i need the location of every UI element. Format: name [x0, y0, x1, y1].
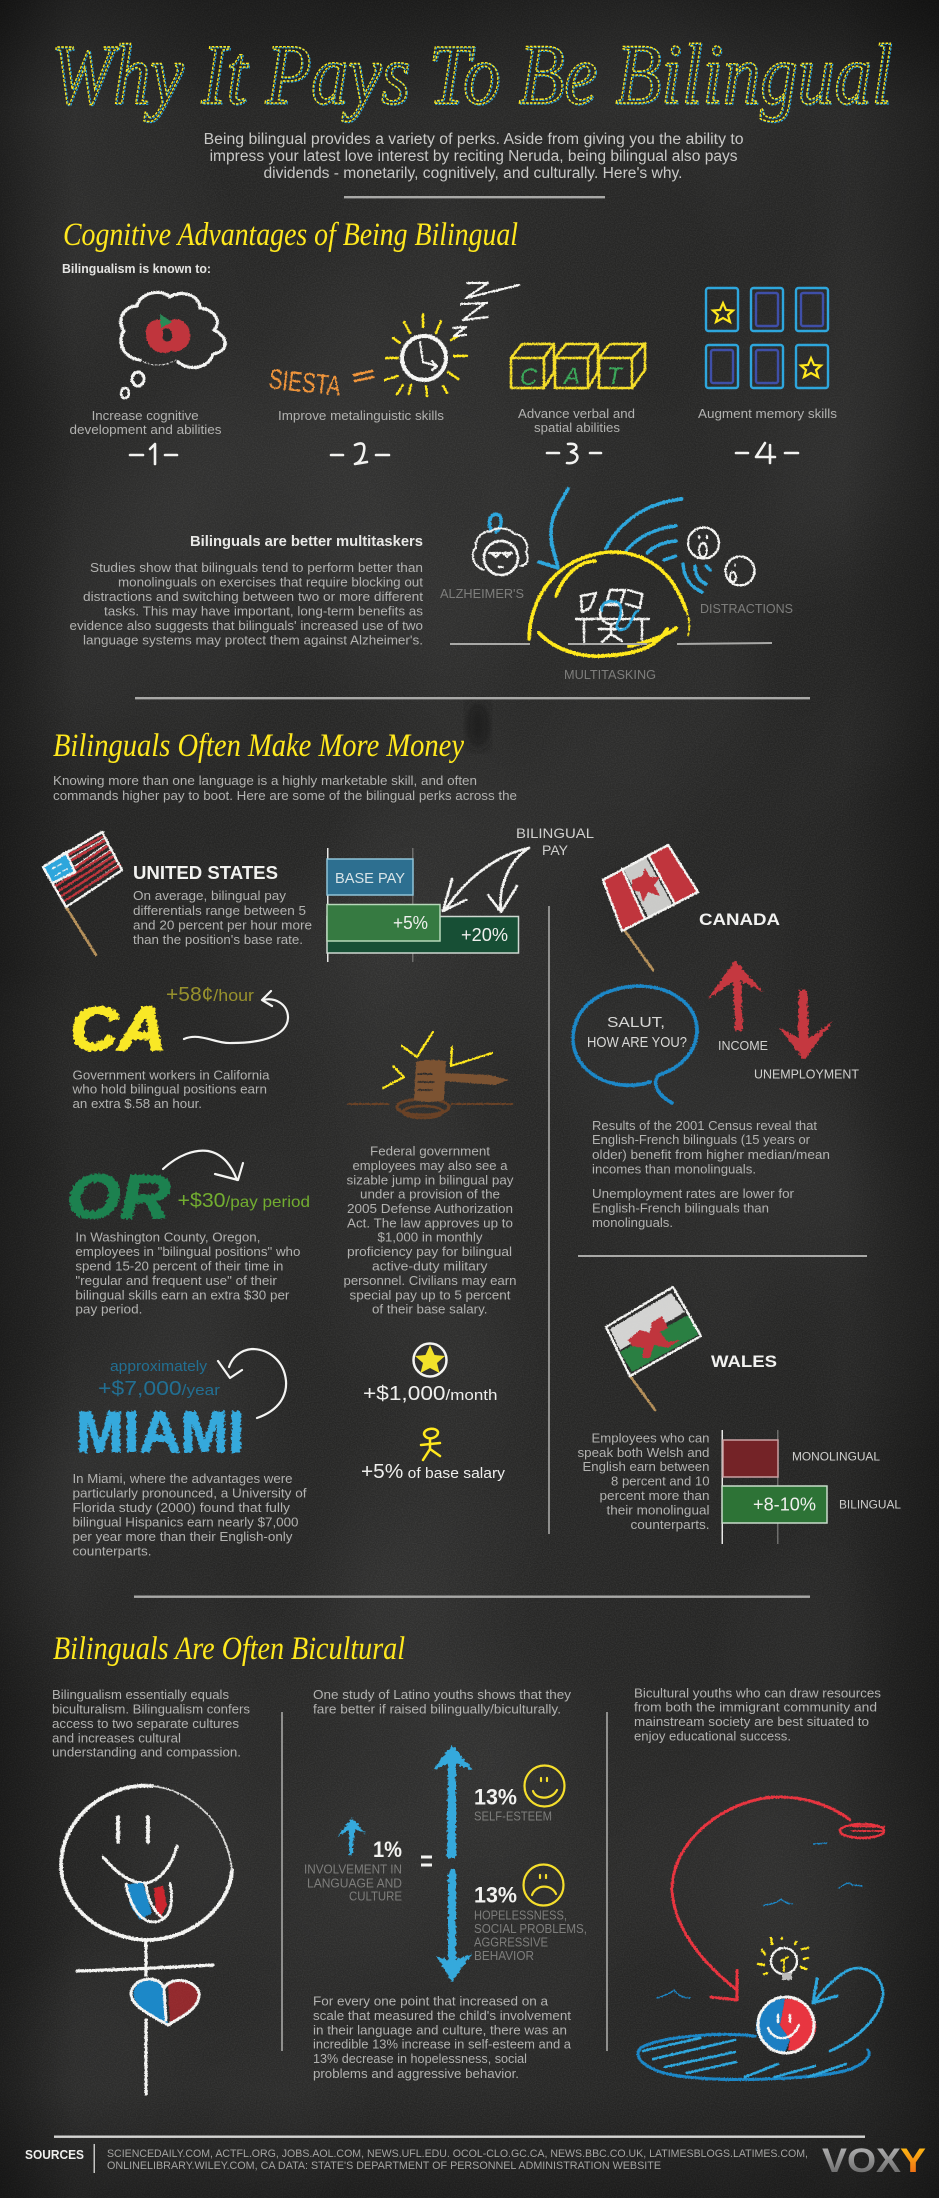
icon: CAT blocks: A [562, 363, 580, 390]
wales text: counterparts. [630, 1517, 710, 1532]
stat: hopelessness: 13% [474, 1882, 517, 1908]
label: involvement: LANGUAGE AND [307, 1876, 402, 1890]
success text: from both the immigrant community and [634, 1700, 877, 1714]
oregon text: spend 15-20 percent of their time in [75, 1258, 283, 1274]
chart: base pay vs bilingual pay [327, 848, 518, 962]
us text: On average, bilingual pay [133, 888, 287, 903]
oregon text: bilingual skills earn an extra $30 per [75, 1288, 290, 1302]
federal text: special pay up to 5 percent [350, 1288, 511, 1302]
icon: big up arrow [433, 1745, 473, 1858]
country: united states: UNITED STATES [133, 863, 278, 883]
bar: +5% [327, 904, 440, 941]
stat: hopelessness: BEHAVIOR [474, 1948, 534, 1963]
logo: voxy: VOX [822, 2142, 901, 2180]
study detail text: in their language and culture, there was an [313, 2022, 567, 2038]
panel: federal [344, 1032, 516, 1483]
panel: multitaskers [70, 489, 793, 682]
caption 1: Increase cognitive [92, 408, 199, 423]
label: multitasking: MULTITASKING [564, 667, 656, 682]
label: bilingual pay [516, 825, 594, 858]
equals sign [421, 1857, 432, 1865]
arrow: CA [184, 991, 288, 1043]
federal text: sizable jump in bilingual pay [346, 1172, 514, 1188]
section: money [25, 728, 926, 2180]
icon: star badge [414, 1344, 446, 1376]
value: +$30 per pay period: +$30/pay period [178, 1190, 310, 1212]
sources list [107, 2148, 808, 2172]
stat: hopelessness: SOCIAL PROBLEMS, [474, 1921, 587, 1936]
miami text: particularly pronounced, a University of [72, 1486, 307, 1500]
country: wales: WALES [711, 1352, 777, 1371]
stat: 1%: 1% [373, 1837, 402, 1862]
icon: unemployment arrow down [779, 990, 833, 1060]
federal text: Federal government [370, 1144, 490, 1158]
arrow: miami [218, 1349, 286, 1418]
oregon text: pay period. [75, 1302, 142, 1316]
canada text: older) benefit from higher median/mean [592, 1147, 830, 1162]
label: bilingual pay: PAY [542, 842, 569, 858]
chart: wales earnings [722, 1430, 902, 1544]
bicultural text left: biculturalism. Bilingualism confers [52, 1702, 250, 1716]
federal text [344, 1144, 516, 1316]
icon: alzheimer's granny [473, 514, 528, 575]
stat: hopelessness: AGGRESSIVE [474, 1934, 548, 1950]
federal text: of their base salary. [372, 1302, 488, 1316]
icon: happy face [524, 1766, 564, 1806]
bicultural text left: Bilingualism essentially equals [52, 1687, 229, 1702]
bicultural text left: and increases cultural [52, 1730, 181, 1746]
california text [71, 1068, 270, 1111]
icon: big down arrow [436, 1869, 472, 1982]
subheading: Bilingualism is known to: [62, 261, 211, 276]
miami text: per year more than their English-only [72, 1529, 293, 1544]
arrows: bilingual pay [443, 848, 529, 912]
success text: Bicultural youths who can draw resources [634, 1686, 882, 1700]
label: CA: CA [70, 995, 166, 1064]
intro text: Being bilingual provides a variety of perks. Aside from giving you the ability to [204, 131, 744, 148]
bar: +5%: +5% [393, 913, 428, 933]
icon: speech bubble: HOW ARE YOU? [587, 1034, 687, 1051]
icon: income arrow up [708, 960, 763, 1031]
icon: yellow stick figure [421, 1429, 440, 1460]
federal text: active-duty military [372, 1258, 488, 1274]
bicultural text left [52, 1687, 250, 1760]
wales text: their monolingual [606, 1502, 710, 1518]
money intro: commands higher pay to boot. Here are some of the bilingual perks across the [53, 788, 517, 803]
label: income: INCOME [718, 1039, 768, 1053]
panel: educational success [634, 1686, 884, 2079]
caption 3 [518, 406, 635, 435]
federal text: Act. The law approves up to [347, 1216, 513, 1230]
california text: who hold bilingual positions earn [71, 1082, 267, 1096]
bicultural text left: access to two separate cultures [52, 1716, 240, 1731]
stat: hopelessness [474, 1882, 587, 1963]
stat: self-esteem: 13% [474, 1784, 517, 1810]
label: involvement [304, 1862, 402, 1904]
sources list: SCIENCEDAILY.COM, ACTFL.ORG, JOBS.AOL.COM, NEWS.UFL.EDU. OCOL-CLO.GC.CA, NEWS.BBC.CO.UK, LATIMESBLOGS.LATIMES.COM, [107, 2148, 808, 2160]
icon: speech bubble: SALUT, [607, 1014, 665, 1031]
label: involvement: CULTURE [349, 1888, 402, 1904]
oregon text [75, 1230, 300, 1316]
icon: canada flag [603, 845, 698, 970]
heading: bicultural: Bilinguals Are Often Bicultural [53, 1631, 405, 1667]
icon: speech bubble [573, 986, 697, 1103]
icon: CAT blocks [511, 343, 645, 391]
bar: bilingual [722, 1486, 827, 1523]
state: miami [72, 1349, 307, 1558]
miami text: counterparts. [72, 1544, 152, 1558]
panel: canada [573, 845, 859, 1230]
california text: an extra $.58 an hour. [72, 1096, 202, 1111]
icon: thought cloud with apple [121, 292, 225, 398]
icon: multitasking dome [529, 489, 710, 656]
label: distractions: DISTRACTIONS [700, 601, 793, 616]
multitasking text: Studies show that bilinguals tend to perform better than [90, 560, 423, 575]
money intro [53, 773, 517, 803]
multitasking text: evidence also suggests that bilinguals' increased use of two [70, 618, 423, 633]
label: unemployment: UNEMPLOYMENT [754, 1068, 859, 1082]
caption 4: Augment memory skills [698, 406, 838, 421]
illustration: bilingual stick figure [61, 1786, 232, 2094]
study text: One study of Latino youths shows that they [313, 1687, 572, 1702]
study text: fare better if raised bilingually/biculturally. [313, 1702, 561, 1716]
multitasking text: language systems may protect them against Alzheimer's. [83, 632, 423, 648]
success text: enjoy educational success. [634, 1728, 791, 1744]
study detail text [313, 1994, 572, 2081]
us text [133, 888, 312, 947]
value: approximately +$7,000 per year: +$7,000 /year [98, 1378, 220, 1400]
label: miami: MIAMI [76, 1400, 244, 1465]
bar: base pay: BASE PAY [335, 870, 405, 887]
wales text [578, 1430, 710, 1532]
number 4 [736, 443, 798, 463]
state: california [70, 984, 288, 1111]
study detail text: For every one point that increased on a [313, 1994, 549, 2008]
sources list: ONLINELIBRARY.WILEY.COM, CA DATA: STATE'S DEPARTMENT OF PERSONNEL ADMINISTRATION WEBSITE [107, 2160, 661, 2172]
stat: hopelessness: HOPELESSNESS, [474, 1908, 567, 1922]
miami text: bilingual Hispanics earn nearly $7,000 [72, 1514, 298, 1530]
section: bicultural [52, 1631, 884, 2094]
success text: mainstream society are best situated to [634, 1714, 869, 1729]
success text [634, 1686, 882, 1744]
oregon text: In Washington County, Oregon, [75, 1230, 260, 1244]
value: approximately +$7,000 per year [98, 1359, 220, 1400]
federal text: employees may also see a [352, 1158, 508, 1173]
bicultural text left: understanding and compassion. [52, 1744, 241, 1760]
canada text: English-French bilinguals (15 years or [592, 1132, 811, 1147]
multitasking text: tasks. This may have important, long-term benefits as [104, 604, 424, 618]
panel: latino youth study [304, 1687, 587, 2081]
label: involvement: INVOLVEMENT IN [304, 1862, 402, 1876]
icon: siesta clock [267, 283, 519, 402]
bar: base pay [327, 859, 413, 895]
oregon text: "regular and frequent use" of their [75, 1273, 278, 1288]
federal text: personnel. Civilians may earn [344, 1273, 516, 1288]
value: +58 cents per hour: +58¢/hour [166, 984, 254, 1006]
icon: memory cards [706, 288, 828, 388]
icon: wales flag [606, 1287, 701, 1410]
label: bilingual pay: BILINGUAL [516, 825, 594, 841]
heading: money: Bilinguals Often Make More Money [53, 728, 464, 764]
ground lines [450, 643, 772, 644]
wales text: percent more than [600, 1488, 710, 1503]
canada text: English-French bilinguals than [592, 1200, 769, 1216]
intro text: impress your latest love interest by reciting Neruda, being bilingual also pays [210, 148, 738, 165]
logo: voxy [822, 2142, 926, 2180]
caption 1 [70, 408, 222, 437]
federal text: under a provision of the [360, 1186, 500, 1202]
label: alzheimer's: ALZHEIMER'S [440, 586, 524, 601]
study detail text: scale that measured the child's involvement [313, 2008, 571, 2023]
multitasking text [70, 560, 424, 648]
heading: multitaskers: Bilinguals are better multitaskers [190, 533, 423, 550]
icon: US flag [43, 832, 122, 955]
bar: monolingual [723, 1440, 778, 1477]
icon: sad face [524, 1864, 564, 1906]
intro text: dividends - monetarily, cognitively, and culturally. Here's why. [264, 165, 682, 182]
label: bilingual: BILINGUAL [839, 1500, 902, 1512]
canada text: Unemployment rates are lower for [592, 1186, 795, 1201]
study detail text: 13% decrease in hopelessness, social [313, 2051, 527, 2066]
miami text [72, 1471, 307, 1558]
arrow: OR [163, 1151, 243, 1180]
icon: CAT blocks: T [607, 363, 624, 390]
federal text: proficiency pay for bilingual [347, 1244, 512, 1259]
caption 1: development and abilities [70, 422, 222, 437]
federal text: 2005 Defense Authorization [347, 1201, 513, 1216]
number 2 [331, 443, 389, 464]
us text: differentials range between 5 [133, 903, 306, 918]
label: sources: SOURCES [25, 2148, 84, 2162]
icon: gavel [348, 1032, 512, 1118]
bar: +20%: +20% [461, 925, 508, 945]
icon: CAT blocks: C [520, 364, 538, 391]
oregon text: employees in "bilingual positions" who [75, 1244, 300, 1259]
study text [313, 1687, 572, 1716]
illustration: two rivers and bicultural face [638, 1797, 884, 2079]
us text: than the position's base rate. [133, 932, 303, 947]
miami text: In Miami, where the advantages were [72, 1471, 292, 1486]
bar: bilingual: +8-10% [753, 1494, 816, 1514]
number 1 [130, 444, 177, 464]
heading: cognitive advantages: Cognitive Advantages of Being Bilingual [63, 217, 518, 253]
logo: voxy: Y [900, 2142, 926, 2180]
country: canada: CANADA [699, 910, 780, 929]
intro text [204, 131, 744, 182]
stat: self-esteem: SELF-ESTEEM [474, 1808, 552, 1824]
multitasking text: monolinguals on exercises that require blocking out [118, 574, 423, 590]
canada text: monolinguals. [592, 1215, 673, 1230]
caption 3: spatial abilities [534, 420, 621, 435]
federal text: $1,000 in monthly [378, 1230, 483, 1244]
value: approximately +$7,000 per year: approximately [110, 1359, 208, 1375]
icon: small up arrow [337, 1818, 366, 1856]
icons: distraction faces [688, 528, 754, 586]
label: OR: OR [67, 1163, 170, 1232]
miami text: Florida study (2000) found that fully [72, 1500, 291, 1515]
bar: +20% [327, 916, 518, 953]
study detail text: problems and aggressive behavior. [313, 2066, 519, 2081]
label: monolingual: MONOLINGUAL [792, 1452, 881, 1464]
money intro: Knowing more than one language is a highly marketable skill, and often [53, 773, 477, 788]
wales text: English earn between [582, 1459, 710, 1474]
state: oregon [67, 1151, 310, 1316]
study detail text: incredible 13% increase in self-esteem and a [313, 2036, 572, 2052]
footer: sources [25, 2136, 926, 2180]
caption 2: Improve metalinguistic skills [278, 408, 445, 423]
icon: siesta clock: SIESTA [267, 363, 342, 402]
value: +$1,000 per month: +$1,000 /month [363, 1383, 498, 1405]
us text: and 20 percent per hour more [133, 918, 312, 932]
panel: wales [578, 1287, 902, 1544]
wales text: speak both Welsh and [578, 1445, 710, 1460]
wales text: 8 percent and 10 [611, 1474, 710, 1488]
stat: self-esteem [474, 1784, 552, 1824]
value: +5% of base salary: +5% of base salary [361, 1461, 506, 1483]
canada text: incomes than monolinguals. [592, 1162, 756, 1176]
number 3 [547, 444, 601, 463]
caption 3: Advance verbal and [518, 406, 635, 421]
canada text: Results of the 2001 Census reveal that [592, 1118, 817, 1133]
california text: Government workers in California [72, 1068, 270, 1082]
canada text [592, 1118, 830, 1230]
section: cognitive advantages [62, 217, 838, 464]
wales text: Employees who can [592, 1430, 710, 1446]
multitasking text: distractions and switching between two or more different [83, 589, 423, 604]
